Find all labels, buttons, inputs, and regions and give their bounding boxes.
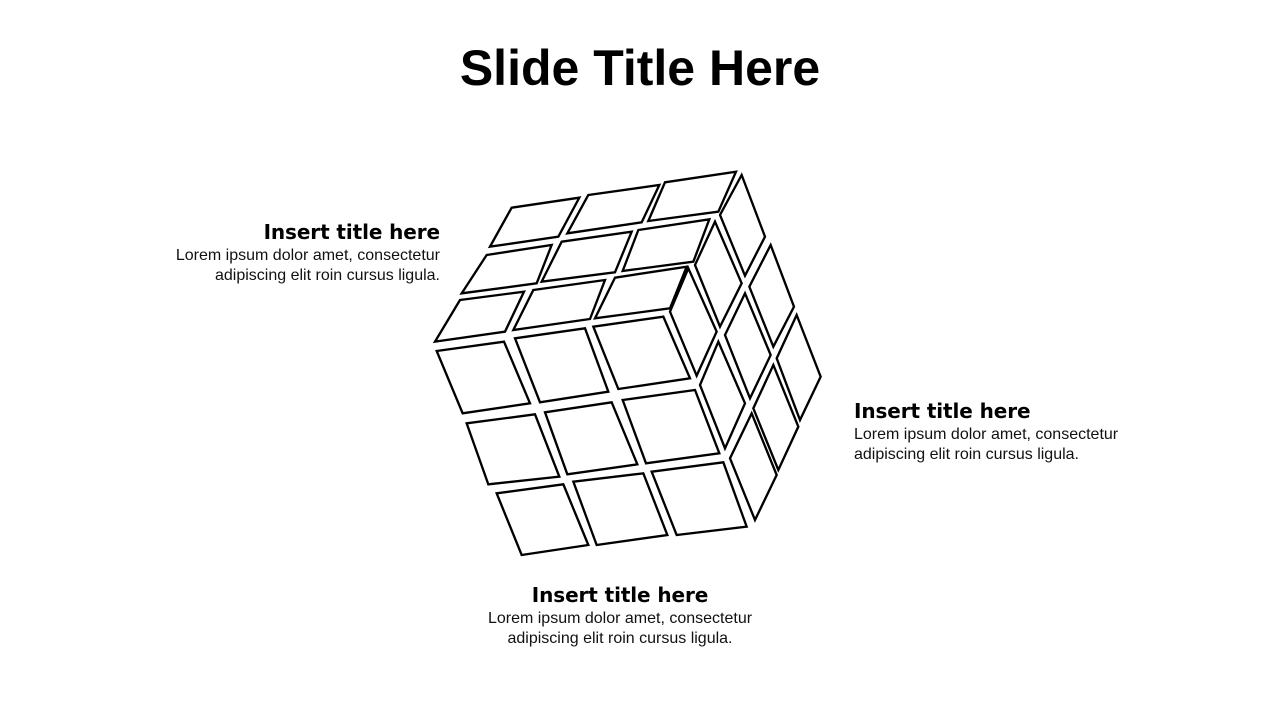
top face <box>435 172 736 342</box>
right body <box>854 426 1118 463</box>
left heading: Insert title here <box>264 220 440 244</box>
title: Slide Title Here <box>460 40 820 96</box>
text block: bottom <box>488 583 752 647</box>
bottom body <box>488 610 752 647</box>
left body <box>176 247 440 284</box>
right heading: Insert title here <box>854 399 1030 423</box>
left body: Lorem ipsum dolor amet, consectetur <box>176 247 440 264</box>
right body: Lorem ipsum dolor amet, consectetur <box>854 426 1118 443</box>
left body: adipiscing elit roin cursus ligula. <box>215 267 440 284</box>
bottom heading: Insert title here <box>532 583 708 607</box>
front face <box>437 317 747 555</box>
right body: adipiscing elit roin cursus ligula. <box>854 446 1079 463</box>
bottom body: adipiscing elit roin cursus ligula. <box>508 630 732 647</box>
text block: left <box>176 220 440 284</box>
bottom body: Lorem ipsum dolor amet, consectetur <box>488 610 752 627</box>
right face <box>670 175 821 520</box>
text block: right <box>854 399 1118 463</box>
